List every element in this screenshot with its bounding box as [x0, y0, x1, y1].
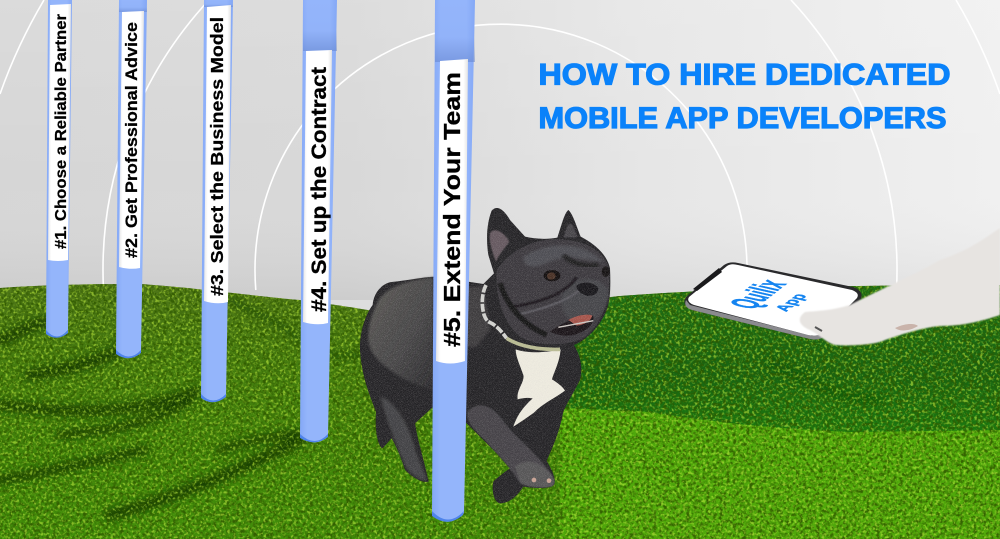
pole 3 label: #3. Select the Business Model [207, 17, 227, 296]
pole 4 [300, 0, 337, 442]
dog nose [576, 283, 598, 296]
dog body silhouette [360, 208, 610, 503]
dog head shading [496, 239, 609, 344]
dog eyes [544, 270, 560, 281]
dog white chest [513, 349, 565, 427]
dog ear inner [490, 230, 509, 262]
grass shadows [0, 300, 880, 515]
pole 1 [46, 0, 72, 338]
french bulldog [360, 208, 610, 504]
dog right ear inner [563, 224, 577, 237]
pole 1 label: #1. Choose a Reliable Partner [53, 14, 70, 249]
dog forehead highlight [523, 245, 603, 267]
concentric white arcs [0, 0, 1000, 290]
pole 2 label: #2. Get Professional Advice [122, 22, 141, 258]
background: grey gradient sky [0, 0, 1000, 300]
phone screen [688, 264, 858, 336]
title: HOW TO HIRE DEDICATED [538, 58, 950, 92]
dog collar band [507, 338, 560, 349]
title [538, 58, 950, 135]
phone showing app: Quilix [721, 276, 795, 312]
grassy ground [0, 280, 1000, 539]
dog rump highlight [368, 277, 433, 390]
dog collar chain [482, 285, 507, 338]
dog muzzle [561, 279, 608, 323]
dog fur texture [360, 208, 610, 503]
dog mouth [550, 315, 594, 336]
white paw holding phone [800, 228, 1000, 345]
title: MOBILE APP DEVELOPERS [538, 102, 946, 135]
phone body [684, 262, 862, 340]
phone showing app [684, 262, 862, 340]
phone showing app: App [770, 292, 811, 313]
pole 2 [116, 0, 147, 358]
dog paw [515, 462, 554, 487]
dog upper back highlight [467, 287, 490, 347]
dog shoulder and front leg [467, 405, 554, 487]
phone notch [693, 268, 722, 291]
dog face wrinkles [513, 277, 577, 307]
dark hill on the right [540, 285, 1000, 432]
pole 5 label: #5. Extend Your Team [439, 72, 465, 347]
pole 3 [201, 0, 233, 402]
dog rear leg highlight [380, 397, 427, 481]
pole 5 [432, 0, 475, 522]
pole 4 label: #4. Set up the Contract [308, 67, 331, 312]
